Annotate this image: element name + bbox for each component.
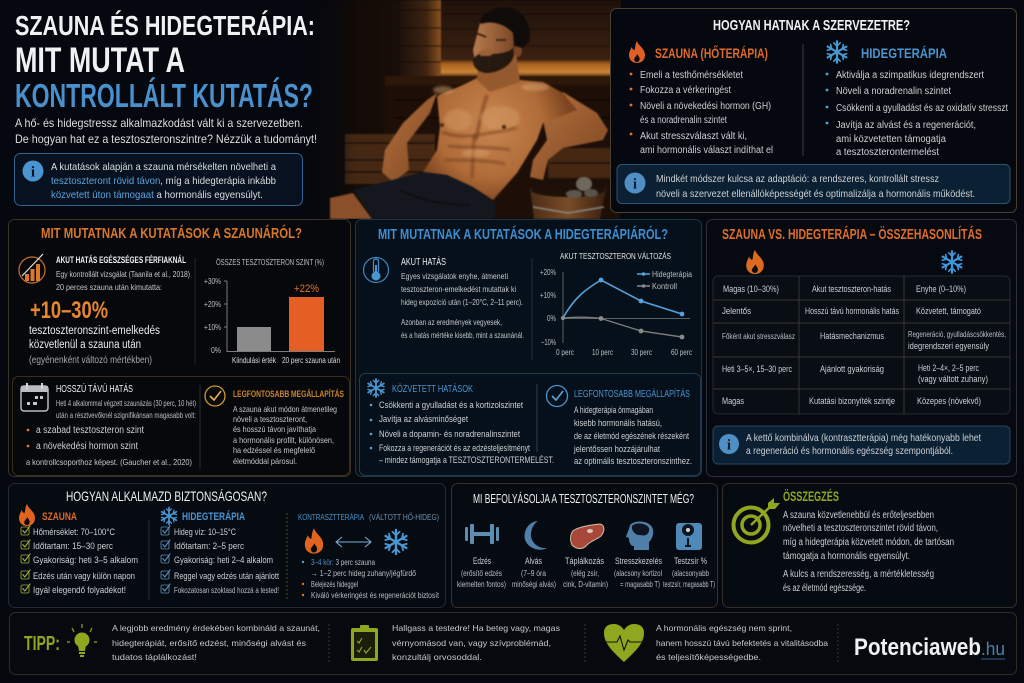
neck: [477, 52, 520, 92]
line chart: acute testosterone change: +10%: [540, 291, 556, 300]
comparison table: Magas: [722, 396, 744, 406]
leg: [330, 193, 420, 219]
key figure: tesztoszteronszint-emelkedés: [29, 325, 160, 337]
cold therapy guidelines: Reggel vagy edzés után ajánlott: [174, 571, 279, 582]
contrast therapy: [298, 513, 440, 600]
cold therapy column: ami közvetetten támogatja: [836, 134, 946, 145]
sub-panel: indirect effects: de az életmód egészének részeként: [574, 431, 689, 442]
acute effect text: és a hatás mértéke kisebb, mint a szaunánál.: [401, 330, 524, 340]
factor labels: Táplálkozás: [565, 556, 604, 566]
key figure: [29, 297, 160, 366]
sub-panel: long-term effect: [12, 376, 350, 476]
sauna column: ami hormonális választ indíthat el: [640, 145, 773, 156]
factor labels: (alacsony kortizol: [614, 569, 662, 578]
callout: adaptation: i: [633, 176, 637, 192]
callout: combination: i: [727, 438, 731, 454]
bar chart: total testosterone: +10%: [204, 323, 221, 332]
sub-panel: indirect effects: KÖZVETETT HATÁSOK: [392, 382, 473, 395]
line chart: acute testosterone change: 0%: [547, 314, 556, 323]
icon: heart with pulse: [604, 624, 644, 662]
logo: Potenciaweb: [854, 634, 981, 661]
sub-panel: indirect effects: Javítja az alvásminőséget: [379, 414, 468, 425]
comparison table: Ajánlott gyakoriság: [820, 364, 884, 374]
sauna guidelines: SZAUNA: [42, 511, 77, 523]
summary text: növelheti a tesztoszteronszintet rövid távon,: [783, 523, 938, 534]
bar chart: total testosterone: +20%: [204, 300, 221, 309]
sauna guidelines: Hőmérséklet: 70–100°C: [33, 527, 115, 538]
icon: body-fat scale: [676, 523, 702, 550]
factor labels: = magasabb T): [620, 580, 660, 589]
factor labels: minőségi alvás): [512, 580, 556, 589]
callout: combination: a regeneráció és hormonális egészség szempontjából.: [746, 445, 953, 457]
icon: clipboard: [351, 625, 378, 661]
icon: steak: [570, 524, 604, 549]
sauna column: SZAUNA (HŐTERÁPIA): [655, 44, 768, 61]
icon: rising chart: [19, 254, 45, 283]
icon: check circle: [205, 386, 225, 406]
contrast therapy: Belejezés hideggel: [311, 580, 358, 589]
icon: snowflake: [942, 251, 962, 273]
sub-panel: long-term effect: után a résztvevőknél szignifikánsan magasabb volt:: [56, 411, 196, 420]
tip label: TIPP:: [24, 633, 60, 655]
cold therapy guidelines: Gyakoriság: heti 2–4 alkalom: [174, 555, 273, 566]
legend: Kontroll: [652, 282, 677, 291]
panel: tips footer: [10, 612, 1016, 674]
legend: Hidegterápia: [652, 270, 692, 279]
summary text: ÖSSZEGZÉS: [783, 488, 839, 504]
beard: [473, 48, 514, 73]
sauna column: Növeli a növekedési hormon (GH): [640, 101, 771, 112]
bar chart: total testosterone: 0%: [211, 346, 221, 355]
callout: adaptation: növeli a szervezet ellenállóképességét és optimalizálja a hormonális működést.: [656, 188, 975, 200]
icon: dumbbell: [465, 524, 499, 544]
callout: research summary: [14, 154, 302, 206]
comparison table: Kutatási bizonyíték szintje: [809, 396, 895, 406]
hair: [480, 7, 530, 48]
sub-panel: indirect effects: – mindez támogatja a TESZTOSZTERONTERMELÉST.: [379, 455, 554, 466]
title: MIT MUTAT A: [15, 41, 185, 80]
factor labels: [457, 556, 715, 589]
callout: combination: A kettő kombinálva (kontrasztterápia) még hatékonyabb lehet: [746, 432, 981, 444]
panel: other influences: [452, 484, 718, 608]
comparison table: Akut tesztoszteron-hatás: [812, 284, 891, 294]
sub-panel: indirect effects: kisebb hormonális hatású,: [574, 418, 662, 429]
cold therapy column: HIDEGTERÁPIA: [861, 45, 947, 61]
icon: moon: [524, 521, 547, 550]
icon: light bulb: [67, 624, 97, 657]
panel: how they affect the body: [610, 8, 1016, 212]
contrast therapy: KONTRASZTTERÁPIA: [298, 513, 365, 522]
cold therapy guidelines: Időtartam: 2–5 perc: [174, 541, 244, 552]
key figure: közvetlenül a szauna után: [29, 339, 141, 351]
subtitle: A hő- és hidegstressz alkalmazkodást vált ki a szervezetben.: [15, 116, 303, 130]
logo: .hu: [981, 639, 1005, 659]
bar chart: total testosterone: 20 perc szauna után: [282, 356, 340, 365]
heading: HOGYAN HATNAK A SZERVEZETRE?: [713, 17, 910, 34]
comparison table: Hosszú távú hormonális hatás: [805, 306, 899, 316]
line chart: acute testosterone change: 0 perc: [556, 348, 574, 357]
sauna column: és a noradrenalin szintet: [640, 115, 727, 126]
factor labels: (erősítő edzés: [461, 569, 502, 578]
heading: HOGYAN ALKALMAZD BIZTONSÁGOSAN?: [66, 488, 267, 504]
sauna guidelines: Gyakoriság: heti 3–5 alkalom: [33, 555, 138, 566]
tip text: hidegterápiát, erősítő edzést, minőségi alvást és: [112, 638, 306, 648]
acute effect text: [56, 255, 190, 292]
cold therapy column: Aktiválja a szimpatikus idegrendszert: [836, 70, 984, 81]
sub-panel: long-term effect: a növekedési hormon szint: [36, 441, 138, 452]
cold therapy column: Növeli a noradrenalin szintet: [836, 86, 951, 97]
sub-panel: long-term effect: LEGFONTOSABB MEGÁLLAPÍTÁS: [233, 389, 344, 399]
hero photo: man relaxing in sauna: [300, 0, 621, 219]
sub-panel: indirect effects: [360, 374, 700, 476]
icon: flame: [746, 250, 764, 274]
long-term health text: hanem hosszú távú befektetés a vitalitásodba: [656, 638, 828, 648]
summary text: A kulcs a rendszeresség, a mértékletesség: [783, 569, 934, 580]
shorts: [353, 172, 496, 219]
listen to your body text: vérnyomásod van, vagy szívproblémád,: [392, 638, 551, 648]
sub-panel: long-term effect: életmóddal párosul.: [233, 456, 297, 466]
factor labels: Stresszkezelés: [615, 556, 662, 566]
callout: adaptation: [617, 164, 1010, 204]
panel: sauna research: [8, 220, 350, 476]
long-term health text: A hormonális egészség nem sprint,: [656, 623, 792, 633]
title: KONTROLLÁLT KUTATÁS?: [15, 77, 313, 114]
bucket with stones: [530, 188, 606, 219]
panel: safe application: [8, 484, 446, 608]
contrast therapy: (VÁLTOTT HŐ-HIDEG): [369, 513, 439, 522]
contrast therapy: Kiváló vérkeringést és regenerációt biztosít: [311, 591, 440, 600]
listen to your body text: Hallgass a testedre! Ha beteg vagy, magas: [392, 623, 560, 633]
callout: combination: [713, 426, 1010, 464]
sauna column: Fokozza a vérkeringést: [640, 85, 731, 96]
contrast therapy: → 1–2 perc hideg zuhany/jégfürdő: [311, 569, 416, 578]
title: SZAUNA ÉS HIDEGTERÁPIA:: [15, 10, 315, 41]
comparison table: Magas (10–30%): [723, 284, 779, 294]
comparison table: idegrendszeri egyensúly: [908, 341, 989, 351]
acute effect text: 20 perces szauna után kimutatta:: [56, 282, 162, 292]
sauna guidelines: Időtartam: 15–30 perc: [33, 541, 113, 552]
icon: target: [734, 498, 780, 542]
sub-panel: indirect effects: az optimális tesztoszteronszinthez.: [574, 456, 692, 467]
factor labels: (alacsonyabb: [672, 569, 709, 578]
sauna column: Emeli a testhőmérsékletet: [640, 70, 743, 81]
line chart: acute testosterone change: 60 perc: [671, 348, 692, 357]
sub-panel: indirect effects: Fokozza a regenerációt és az edzésteljesítményt: [379, 443, 530, 454]
listen to your body text: [392, 623, 560, 662]
cold therapy guidelines: [161, 508, 279, 595]
icon: calendar: [21, 383, 48, 411]
ear: [514, 43, 522, 57]
legend: [637, 270, 692, 291]
long-term health text: és teljesítőképességedbe.: [656, 652, 761, 662]
line chart: acute testosterone change: AKUT TESZTOSZTERON VÁLTOZÁS: [560, 252, 671, 261]
panel: cold therapy research: [356, 220, 702, 476]
line chart: acute testosterone change: 30 perc: [631, 348, 652, 357]
comparison table: Heti 2–4×, 2–5 perc: [918, 363, 979, 373]
sub-panel: long-term effect: A szauna akut módon átmenetileg: [233, 404, 337, 414]
tip text: [112, 623, 320, 662]
sauna guidelines: Edzés után vagy külön napon: [33, 571, 135, 582]
cold therapy column: a tesztoszterontermelést: [836, 147, 939, 158]
sub-panel: indirect effects: Növeli a dopamin- és noradrenalinszintet: [379, 429, 520, 440]
sub-panel: long-term effect: HOSSZÚ TÁVÚ HATÁS: [56, 382, 133, 395]
comparison table: Hatásmechanizmus: [820, 331, 884, 341]
factor labels: Testzsír %: [674, 556, 707, 566]
bar chart: total testosterone: [204, 258, 340, 365]
callout: research summary: közvetett úton támogaat a hormonális egyensúlyt.: [51, 189, 263, 201]
factor labels: (7–9 óra: [521, 569, 546, 578]
line chart: acute testosterone change: −10%: [541, 338, 556, 347]
summary text: A szauna közvetlenebbül és erőteljesebben: [783, 510, 934, 521]
heading: MI BEFOLYÁSOLJA A TESZTOSZTERONSZINTET MÉG?: [473, 491, 694, 506]
icon: check circle: [546, 386, 568, 406]
comparison table: Közepes (növekvő): [917, 396, 981, 406]
factor labels: cink, D-vitamin): [563, 580, 608, 589]
heading: MIT MUTATNAK A KUTATÁSOK A SZAUNÁRÓL?: [41, 224, 302, 242]
acute effect text: tesztoszteron-emelkedést mutattak ki: [401, 284, 516, 294]
panel: comparison: [706, 220, 1016, 476]
right arm: [530, 92, 608, 180]
factor labels: testzsír, magasabb T): [663, 580, 715, 589]
summary text: támogatja a hormonális egyensúlyt.: [783, 551, 910, 562]
comparison table: Főként akut stresszválasz: [722, 332, 795, 341]
comparison table: Enyhe (0–10%): [916, 284, 966, 294]
contrast therapy: 3–4 kör: 3 perc szauna: [311, 558, 375, 567]
sub-panel: long-term effect: a hormonális profilt, különösen,: [233, 435, 334, 445]
factor labels: Edzés: [473, 556, 491, 566]
bar chart: total testosterone: +22%: [294, 283, 319, 295]
subtitle: [15, 116, 317, 146]
cold therapy column: [826, 41, 1008, 158]
torso: [423, 78, 577, 200]
cold therapy column: Javítja az alvást és a regenerációt,: [836, 120, 976, 131]
line chart: acute testosterone change: [540, 252, 692, 357]
factor labels: (elég zsír,: [571, 569, 599, 578]
comparison table: Közvetett, támogató: [916, 306, 981, 316]
sauna column: [629, 41, 773, 156]
key figure: +10–30%: [30, 297, 108, 324]
callout: research summary: tesztoszteront rövid távon, míg a hidegterápia inkább: [51, 175, 276, 187]
sub-panel: long-term effect: a szabad tesztoszteron szint: [36, 425, 144, 436]
listen to your body text: konzultálj orvosoddal.: [392, 652, 482, 662]
cold therapy guidelines: Fokozatosan szoktasd hozzá a tested!: [174, 586, 279, 595]
acute effect text: AKUT HATÁS: [401, 255, 446, 268]
acute effect text: Egy kontrollált vizsgálat (Taanila et al., 2018): [56, 269, 190, 279]
summary text: és az életmód egészsége.: [783, 583, 866, 594]
callout: research summary: i: [31, 164, 35, 180]
summary text: míg a hidegterápia közvetett módon, de tartósan: [783, 537, 954, 548]
sub-panel: indirect effects: jelentőssen hozzájárulhat: [573, 444, 660, 455]
title: [15, 10, 315, 114]
long-term health text: [656, 623, 828, 662]
acute effect text: Egyes vizsgálatok enyhe, átmeneti: [401, 271, 508, 281]
line chart: acute testosterone change: 10 perc: [592, 348, 613, 357]
sub-panel: indirect effects: LEGFONTOSABB MEGÁLLAPÍTÁS: [574, 387, 690, 400]
sauna guidelines: [19, 504, 138, 596]
sub-panel: long-term effect: növeli a tesztoszteront,: [233, 414, 307, 424]
face: [473, 18, 514, 72]
sauna guidelines: Igyál elegendő folyadékot!: [33, 585, 126, 596]
acute effect text: [401, 255, 524, 340]
factor labels: Alvás: [525, 556, 542, 566]
sauna column: Akut stresszválaszt vált ki,: [640, 131, 747, 142]
factor labels: kiemelten fontos): [457, 580, 506, 589]
subtitle: De hogyan hat ez a tesztoszteronszintre? Nézzük a tudományt!: [15, 132, 317, 146]
icon: head with brain: [626, 521, 653, 550]
callout: adaptation: Mindkét módszer kulcsa az adaptáció: a rendszeres, kontrollált stressz: [656, 173, 939, 185]
comparison table: [713, 276, 1010, 414]
bar chart: total testosterone: +30%: [204, 277, 221, 286]
acute effect text: Azonban az eredmények vegyesek,: [401, 317, 502, 327]
tip text: tudatos táplálkozást!: [112, 652, 197, 662]
comparison table: (vagy váltott zuhany): [918, 374, 988, 384]
comparison table: Jelentős: [722, 306, 751, 316]
sub-panel: long-term effect: Heti 4 alkalommal végzett szaunázás (30 perc, 10 hét): [56, 399, 196, 408]
icon: thermometer: [364, 258, 388, 282]
heading: MIT MUTATNAK A KUTATÁSOK A HIDEGTERÁPIÁRÓL?: [378, 225, 668, 243]
cold therapy guidelines: Hideg víz: 10–15°C: [174, 527, 236, 538]
acute effect text: hideg expozíció után (1–20°C, 2–11 perc).: [401, 297, 523, 307]
tip text: A legjobb eredmény érdekében kombináld a szaunát,: [112, 623, 320, 633]
comparison table: Heti 3–5×, 15–30 perc: [722, 364, 792, 374]
line chart: acute testosterone change: +20%: [540, 268, 556, 277]
summary text: [783, 488, 954, 594]
left arm: [382, 93, 437, 182]
callout: research summary: A kutatások alapján a szauna mérsékelten növelheti a: [51, 161, 276, 173]
bar chart: total testosterone: ÖSSZES TESZTOSZTERON SZINT (%): [216, 258, 324, 267]
sub-panel: long-term effect: ha edzéssel és megfelelő: [233, 445, 315, 455]
sub-panel: long-term effect: és hosszú távon javíthatja: [233, 424, 316, 434]
sub-panel: indirect effects: Csökkenti a gyulladást és a kortizolszintet: [379, 400, 523, 411]
bar chart: total testosterone: Kiindulási érték: [232, 356, 277, 365]
key figure: (egyénenként változó mértékben): [29, 355, 152, 366]
cold therapy guidelines: HIDEGTERÁPIA: [182, 510, 245, 523]
sub-panel: long-term effect: a kontrollcsoporthoz képest. (Gaucher et al., 2020): [26, 457, 192, 467]
panel: summary: [722, 484, 1016, 608]
sub-panel: indirect effects: A hidegterápia önmagában: [574, 405, 653, 416]
acute effect text: AKUT HATÁS EGÉSZSÉGES FÉRFIAKNÁL: [56, 255, 186, 266]
